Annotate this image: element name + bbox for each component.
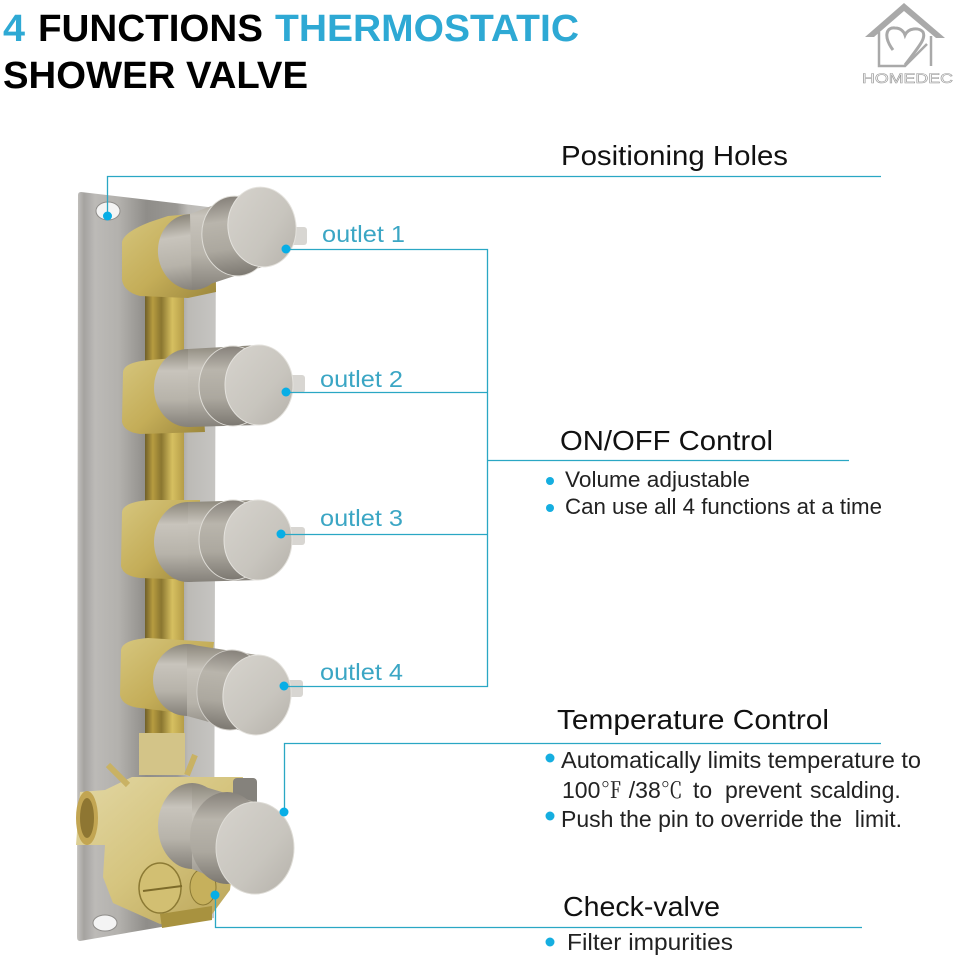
outlet labels: outlet 3 (320, 505, 403, 531)
title: SHOWER VALVE (3, 55, 308, 97)
panel: temperature control: scalding. (810, 777, 901, 803)
heading: Positioning Holes: Positioning Holes (561, 140, 788, 171)
panel: temperature control: Automatically limits temperature to (561, 747, 921, 773)
knob 4 (153, 644, 295, 738)
knob pins (290, 227, 307, 245)
mounting plate (77, 192, 216, 941)
panel: ON/OFF control: Volume adjustable (565, 467, 750, 492)
outlet labels: outlet 4 (320, 659, 403, 685)
panel: ON/OFF control: Can use all 4 functions at a time (565, 494, 882, 519)
icon: HOMEDEC logo (862, 3, 953, 86)
knob 2 (154, 345, 293, 427)
brass pipe (145, 285, 184, 755)
callout lines (108, 176, 881, 928)
panel: ON/OFF control: ON/OFF Control (560, 425, 773, 456)
knob 1 (153, 183, 301, 294)
panel: temperature control: Push the pin to override the limit. (561, 806, 902, 832)
panel: temperature control (546, 704, 921, 832)
title: THERMOSTATIC (275, 8, 579, 50)
knob 3 (154, 500, 292, 582)
panel: check-valve: Check-valve (563, 891, 720, 922)
panel: temperature control: 100℉ /38℃ (562, 774, 683, 805)
title: FUNCTIONS (38, 8, 263, 50)
icon: HOMEDEC logo: HOMEDEC (862, 70, 953, 86)
outlet labels: outlet 2 (320, 366, 403, 392)
thermostatic body (76, 733, 243, 928)
panel: temperature control: Temperature Control (557, 704, 829, 735)
outlet labels: outlet 1 (322, 221, 405, 247)
title (3, 8, 579, 97)
callout dots (103, 212, 290, 900)
panel: ON/OFF control (546, 425, 882, 519)
valve product photo (76, 183, 307, 941)
positioning holes (96, 202, 120, 220)
brass blocks (122, 212, 216, 298)
outlet labels (320, 221, 405, 685)
title: 4 (3, 8, 25, 50)
panel: check-valve (546, 891, 733, 955)
panel: temperature control: to (693, 777, 712, 803)
panel: temperature control: prevent (725, 777, 802, 803)
panel: check-valve: Filter impurities (567, 929, 733, 955)
temperature knob (158, 778, 294, 894)
